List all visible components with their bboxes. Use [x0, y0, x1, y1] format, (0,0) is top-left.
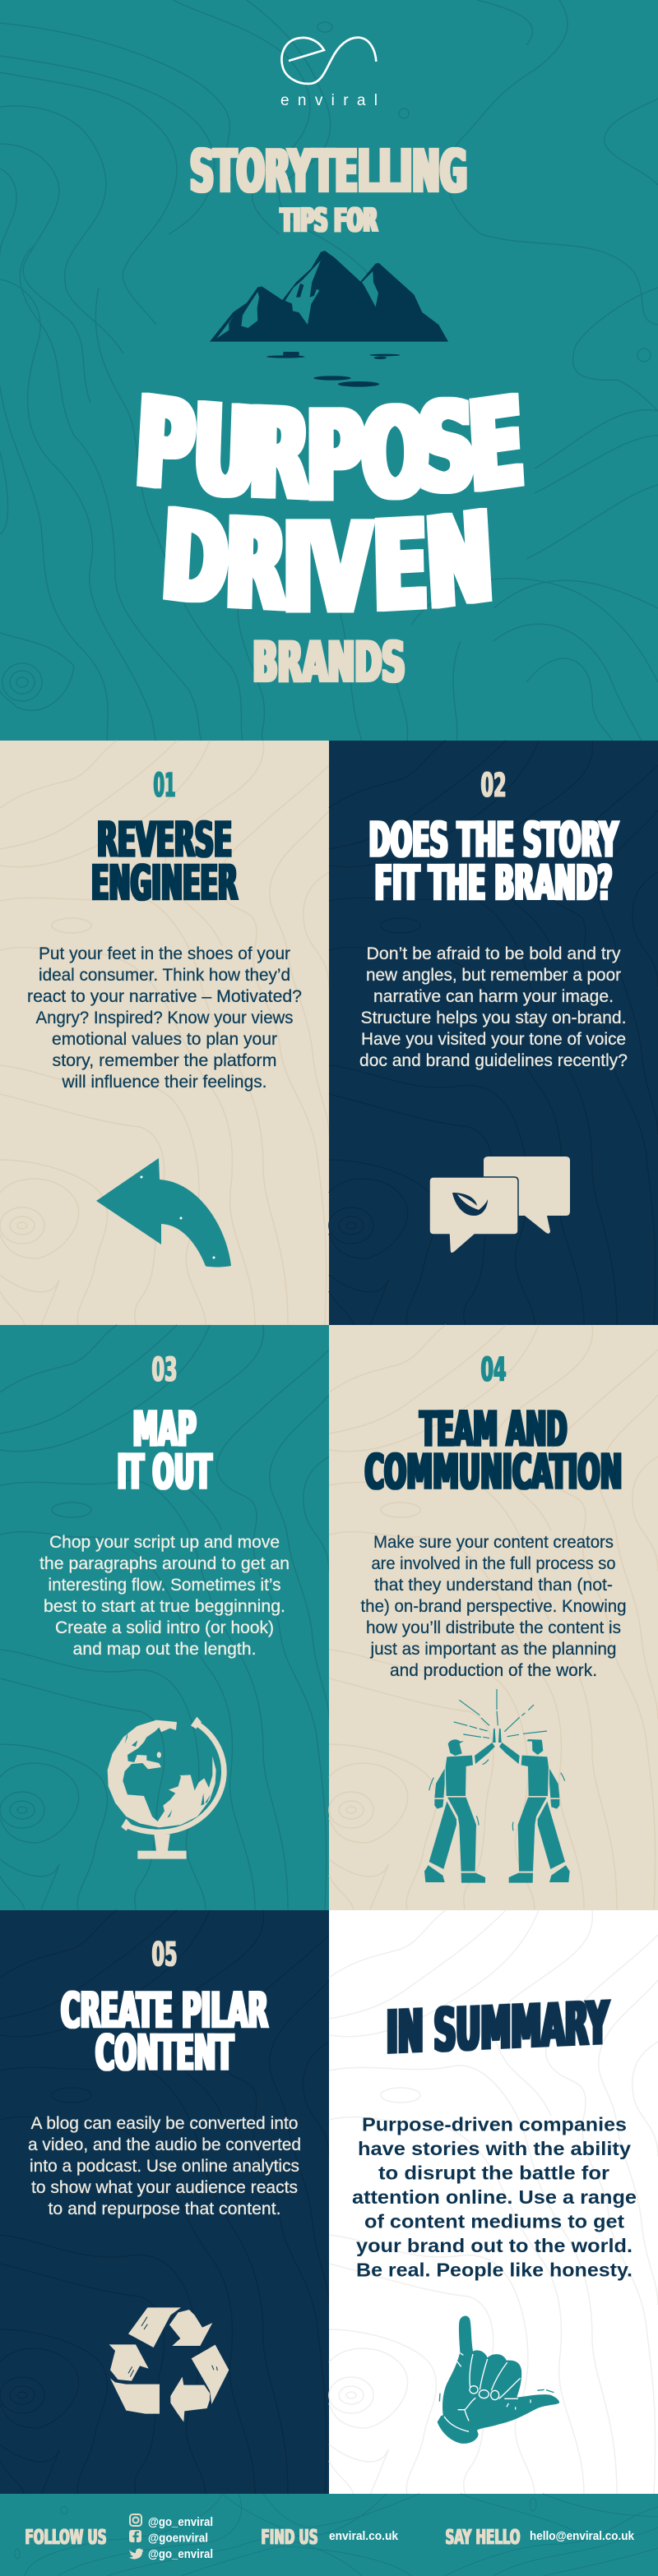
number 05: 05 [151, 1937, 178, 1974]
text block: Don’t be afraid to be bold and try [367, 944, 621, 963]
footer [0, 2494, 658, 2576]
text block [360, 1533, 627, 1680]
panel: 01 reverse engineer: 01 [153, 767, 176, 805]
text block: doc and brand guidelines recently? [359, 1051, 628, 1070]
social handles [129, 2514, 213, 2561]
text block: best to start at true begginning. [44, 1597, 285, 1616]
panel: 04 team and communication [329, 1325, 658, 1910]
social handles: @goenviral [148, 2532, 208, 2545]
heading: map it out [117, 1401, 212, 1500]
text block: attention online. Use a range [352, 2186, 637, 2208]
email: hello@enviral.co.uk [530, 2529, 635, 2543]
title: brands: BRANDS [253, 630, 405, 695]
text block: of content mediums to get [364, 2211, 624, 2232]
text block [28, 2114, 301, 2218]
text block: Make sure your content creators [373, 1533, 614, 1552]
text block: the paragraphs around to get an [39, 1554, 290, 1573]
icon: facebook [129, 2530, 141, 2542]
icon: instagram [130, 2514, 141, 2526]
text block: your brand out to the world. [356, 2235, 633, 2256]
title: driven: DRIVEN [160, 485, 496, 639]
logo: enviral [280, 38, 378, 109]
number 04: 04 [480, 1351, 507, 1389]
title: purpose: PURPOSE [133, 372, 526, 528]
text block: new angles, but remember a poor [366, 966, 621, 985]
text block: Put your feet in the shoes of your [39, 944, 290, 963]
text block: just as important as the planning [370, 1640, 617, 1659]
text block: to disrupt the battle for [378, 2162, 609, 2183]
text block: will influence their feelings. [61, 1073, 266, 1092]
text block: to show what your audience reacts [31, 2178, 298, 2197]
text block: Chop your script up and move [49, 1533, 280, 1552]
website: enviral.co.uk [329, 2529, 399, 2543]
text block: into a podcast. Use online analytics [30, 2157, 299, 2176]
text block [27, 944, 302, 1092]
heading: team and communication [365, 1401, 622, 1500]
panel: 03 map it out [0, 1325, 329, 1910]
text block: and map out the length. [72, 1640, 257, 1659]
text block [352, 2114, 637, 2280]
heading: reverse engineer: ENGINEER [91, 855, 238, 911]
text block: story, remember the platform [53, 1051, 276, 1070]
icon: globe [108, 1717, 224, 1859]
panel: in summary [329, 1910, 658, 2495]
text block: Have you visited your tone of voice [361, 1030, 626, 1049]
social handles: @go_enviral [148, 2515, 213, 2529]
heading: reverse engineer [91, 811, 238, 911]
text block: A blog can easily be converted into [31, 2114, 298, 2133]
text block: that they understand than (not- [374, 1576, 613, 1595]
heading: create pilar content [61, 1983, 268, 2082]
text block: to and repurpose that content. [48, 2200, 281, 2218]
text block: ideal consumer. Think how they’d [39, 966, 290, 985]
heading: create pilar content: CREATE PILAR [61, 1983, 268, 2040]
text block [359, 944, 628, 1070]
panel: 02 does the story fit the brand [329, 741, 658, 1325]
heading: map it out: MAP [133, 1401, 196, 1457]
text block: Be real. People like honesty. [356, 2259, 633, 2280]
text block: are involved in the full process so [372, 1554, 615, 1573]
panel: 05 create pilar content [0, 1910, 329, 2495]
icon: recycle [109, 2307, 229, 2422]
text block: react to your narrative – Motivated? [27, 987, 302, 1006]
icon: twitter [129, 2548, 143, 2560]
icon: speech bubbles [429, 1156, 570, 1253]
say hello: SAY HELLO [446, 2525, 520, 2549]
text block: how you’ll distribute the content is [366, 1618, 621, 1637]
social handles: @go_enviral [148, 2547, 213, 2561]
icon: reverse arrow [96, 1158, 231, 1267]
panel: 01 reverse engineer [0, 741, 329, 1325]
text block: have stories with the ability [358, 2138, 631, 2159]
text block: the) on-brand perspective. Knowing [360, 1597, 627, 1616]
hero panel [0, 0, 658, 741]
text block: Angry? Inspired? Know your views [36, 1009, 293, 1027]
icon: high five [424, 1689, 570, 1883]
title: tips for: TIPS FOR [280, 202, 378, 240]
text block: Purpose-driven companies [362, 2114, 627, 2135]
follow us: FOLLOW US [25, 2525, 107, 2549]
icon: mountains [210, 251, 448, 387]
heading: does the story fit the brand [368, 811, 619, 911]
text block: emotional values to plan your [52, 1030, 277, 1049]
heading: reverse engineer: REVERSE [97, 811, 232, 868]
text block: a video, and the audio be converted [28, 2135, 301, 2154]
number 03: 03 [151, 1351, 178, 1389]
number 02: 02 [480, 767, 507, 805]
text block: Structure helps you stay on-brand. [360, 1009, 627, 1027]
text block [39, 1533, 290, 1659]
text block: and production of the work. [390, 1661, 597, 1680]
text block: Create a solid intro (or hook) [55, 1618, 274, 1637]
text block: interesting flow. Sometimes it’s [48, 1576, 281, 1595]
heading: create pilar content: CONTENT [95, 2024, 234, 2082]
find us: FIND US [262, 2525, 317, 2549]
text block: narrative can harm your image. [373, 987, 614, 1006]
logo: enviral: enviral [280, 92, 378, 109]
heading: map it out: IT OUT [117, 1443, 212, 1500]
icon: shaka hand [438, 2315, 559, 2444]
